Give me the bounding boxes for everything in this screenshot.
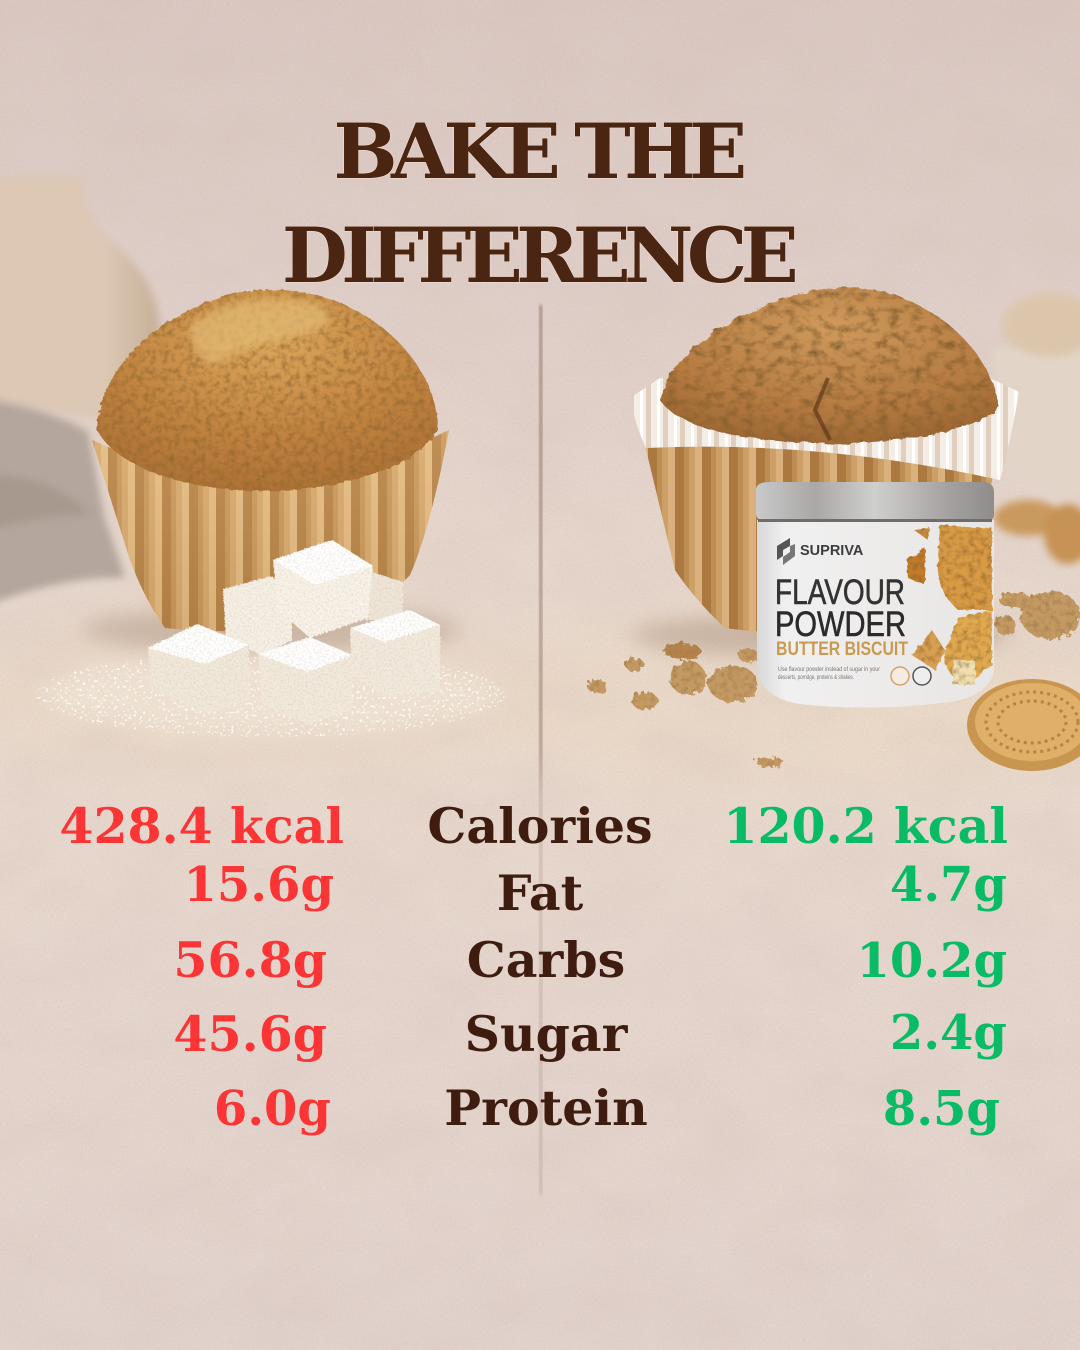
row: fat [184, 857, 1007, 922]
biscuit crumbs [587, 591, 1080, 767]
row: sugar [173, 1005, 1007, 1063]
row: sugar: Sugar [465, 1005, 629, 1063]
center divider [539, 305, 542, 1195]
product jar: Supriva flavour powder [756, 482, 994, 708]
title: DIFFERENCE [282, 211, 796, 300]
row: fat: 4.7g [890, 857, 1007, 913]
title: BAKE THE [333, 107, 744, 196]
dome [660, 287, 998, 443]
sugar spill [35, 653, 505, 737]
row: carbs: 10.2g [857, 933, 1007, 989]
brand logo [777, 538, 864, 565]
jar label text: FLAVOUR [775, 573, 905, 612]
row: carbs: 56.8g [173, 931, 327, 989]
row: sugar: 45.6g [173, 1005, 327, 1063]
brand logo: SUPRIVA [800, 543, 864, 559]
biscuit artwork on label [907, 525, 992, 686]
sugar cubes [148, 540, 440, 724]
wrapper [92, 430, 449, 631]
jar label text [775, 573, 908, 681]
row: protein [214, 1079, 1000, 1137]
jar label text: BUTTER BISCUIT [776, 639, 908, 660]
right background: bowl and crumbs [992, 293, 1080, 564]
row: fat: Fat [497, 864, 584, 922]
row: carbs: Carbs [467, 931, 625, 989]
row: protein: 8.5g [883, 1081, 1000, 1137]
folded cloth [0, 396, 125, 612]
jar lid [756, 482, 994, 521]
shadow [80, 606, 460, 654]
jar label text: desserts, porridge, proteins & shakes. [778, 675, 854, 681]
row: protein: 6.0g [214, 1081, 331, 1137]
whole biscuit [967, 679, 1080, 771]
row: carbs [173, 931, 1007, 989]
jar label text: Use flavour powder instead of sugar in your [778, 667, 880, 673]
muffin without product: left [80, 290, 460, 654]
row: calories: Calories [427, 797, 653, 855]
row: sugar: 2.4g [890, 1005, 1007, 1061]
white paper rim [630, 378, 1019, 480]
vase in background [0, 176, 160, 422]
jar body [757, 520, 994, 708]
jar label text: POWDER [775, 605, 906, 644]
row: fat: 15.6g [184, 857, 334, 913]
muffin with flavour powder: right [630, 287, 1019, 657]
dome [97, 290, 438, 491]
title [282, 107, 796, 300]
row: calories: 120.2 kcal [723, 797, 1008, 855]
wrapper [645, 445, 1000, 633]
row: calories [59, 797, 1008, 855]
row: calories: 428.4 kcal [59, 797, 344, 855]
row: protein: Protein [444, 1079, 648, 1137]
